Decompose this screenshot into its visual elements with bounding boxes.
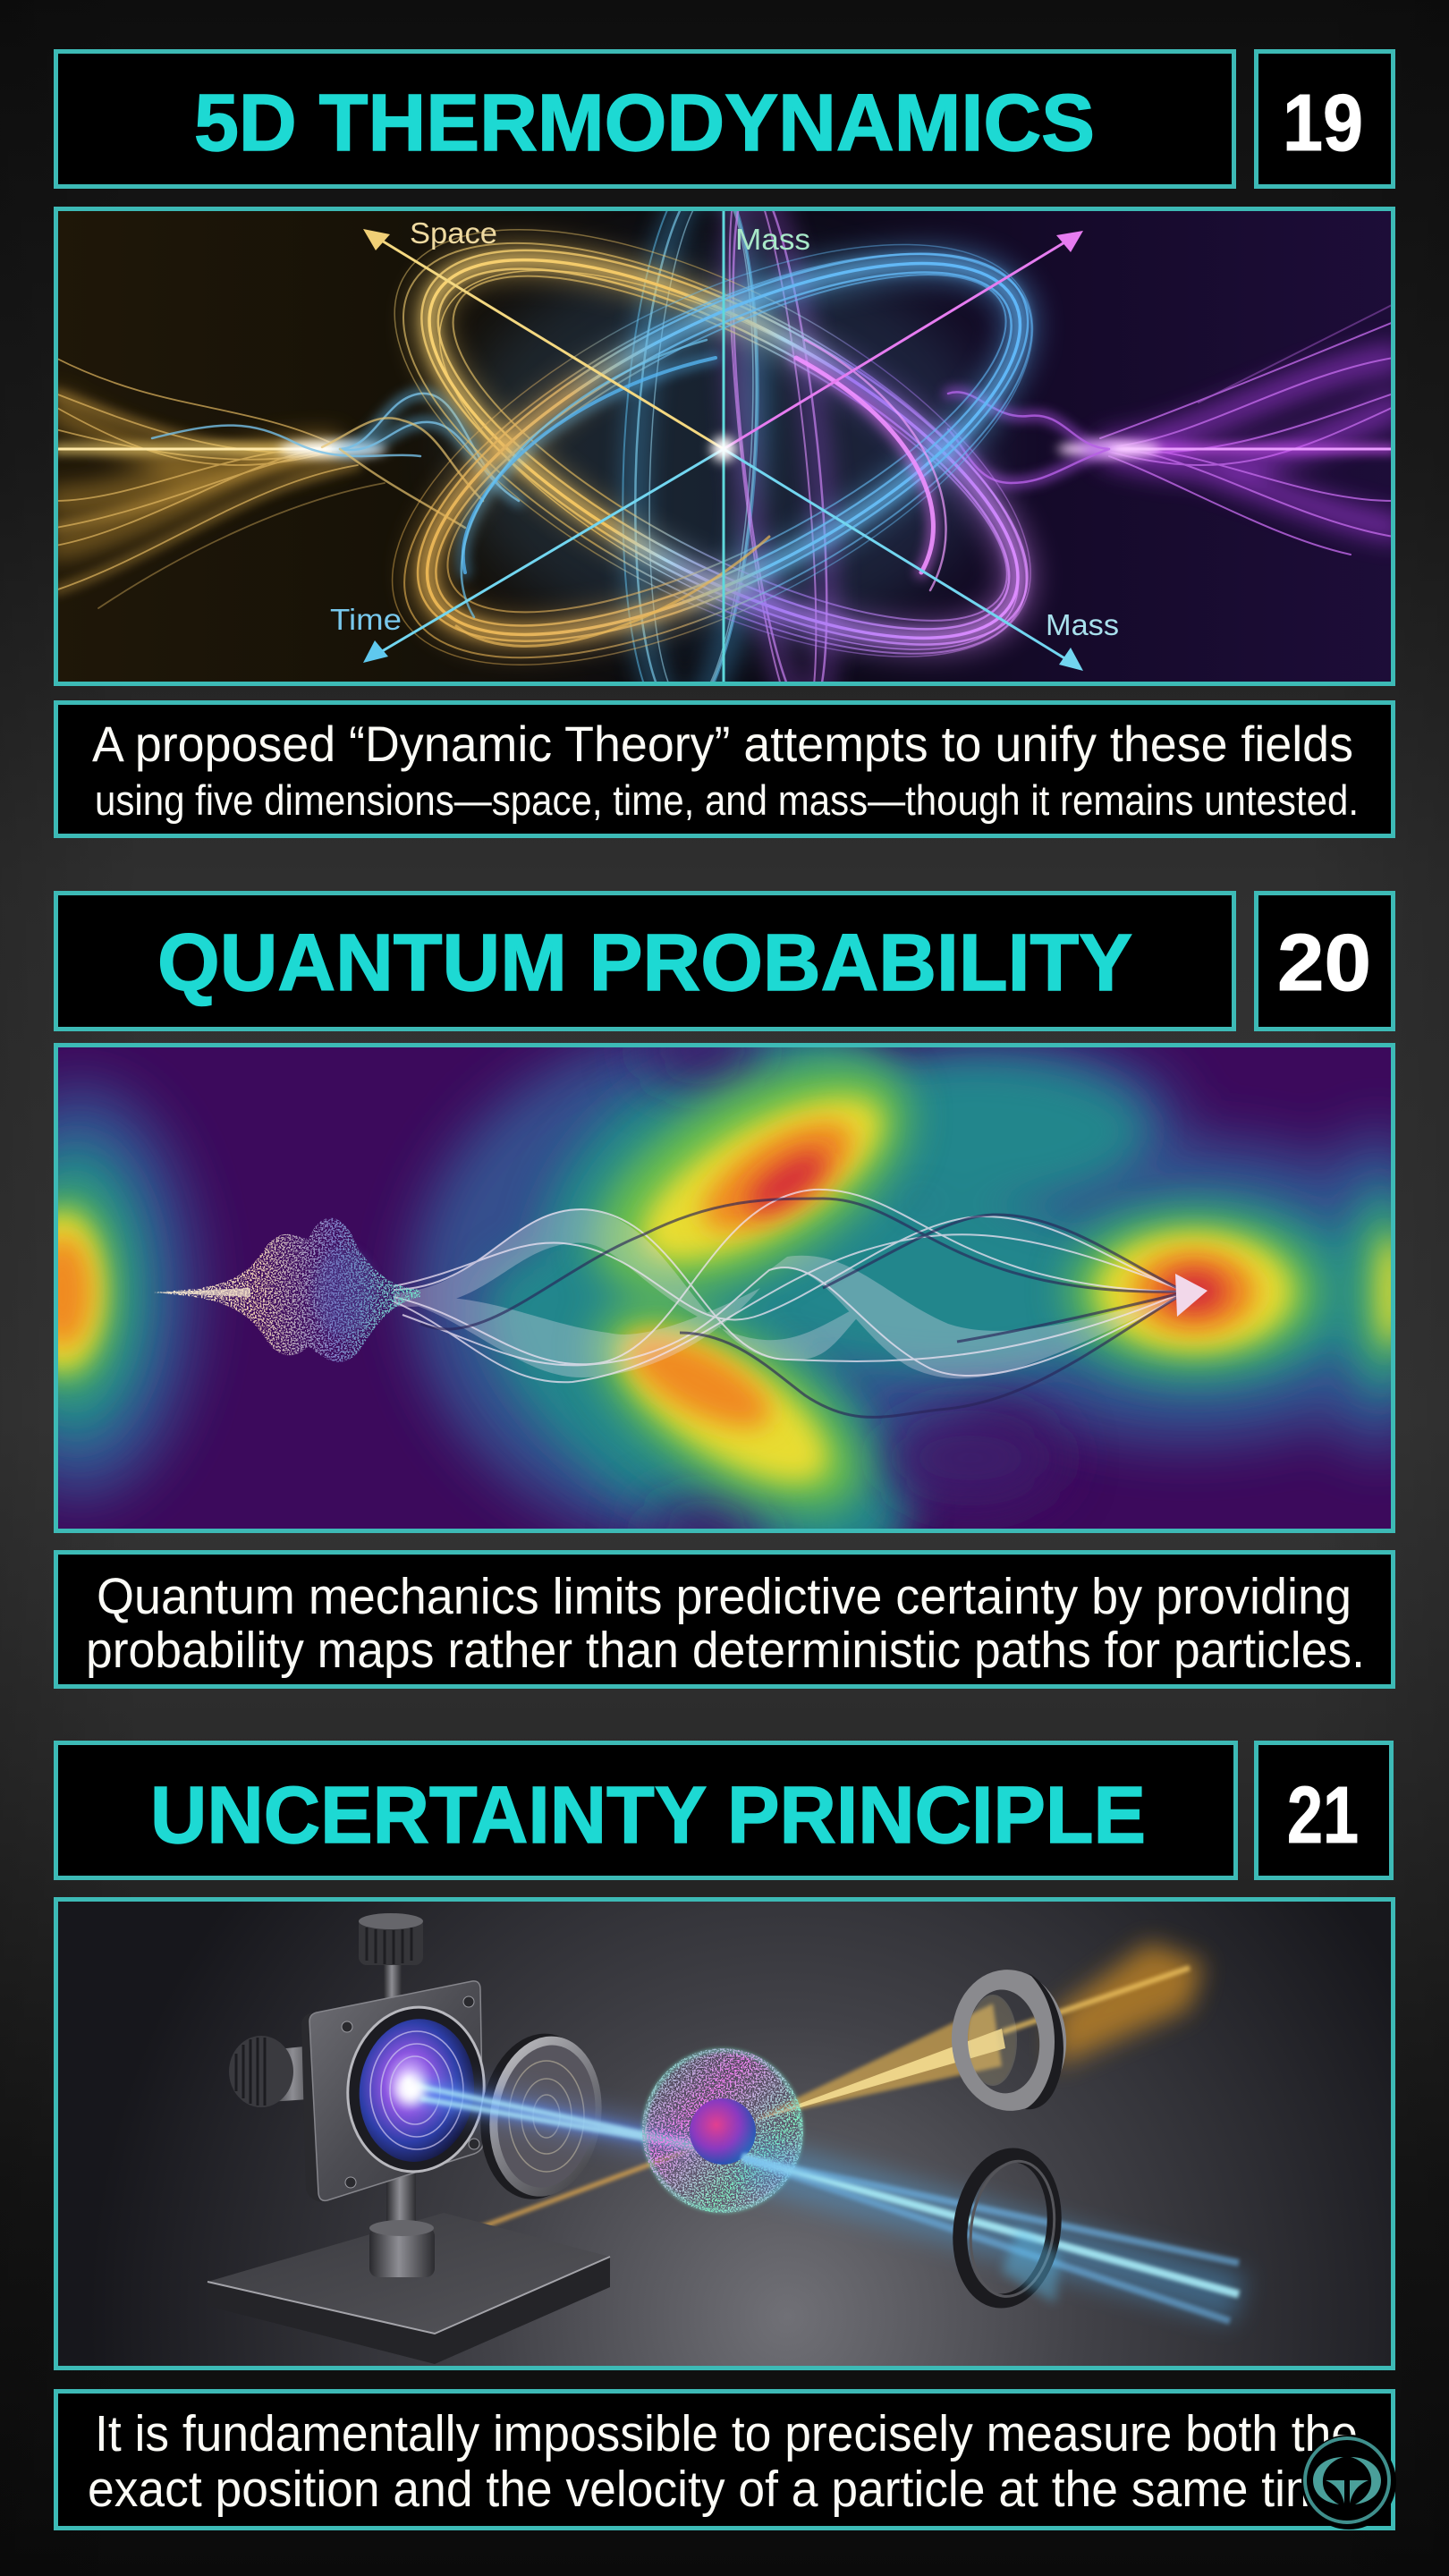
panel: uncertainty principle — [55, 1742, 1394, 2528]
panel: 5D thermodynamics — [55, 52, 1394, 835]
heading: 5D Thermodynamics — [55, 52, 1234, 186]
heading: 5D Thermodynamics: 5D THERMODYNAMICS — [194, 79, 1095, 168]
post and collar — [369, 2174, 435, 2277]
axis labels — [330, 216, 1119, 641]
tilted ring B: gold to blue — [392, 230, 1054, 668]
top right ring detector — [947, 1966, 1071, 2114]
heading: Quantum Probability — [55, 893, 1234, 1029]
left yellow wave bundle — [55, 358, 519, 608]
stand base — [208, 2213, 610, 2364]
heading: Uncertainty Principle — [55, 1742, 1236, 1878]
number badge 19 — [1256, 52, 1394, 186]
caption: dynamic theory: A proposed “Dynamic Theory” attempts to unify these fields — [92, 716, 1353, 772]
illustration: optical measurement apparatus — [55, 1899, 1394, 2368]
caption: quantum mechanics: probability maps rather than deterministic paths for particles. — [86, 1622, 1365, 1679]
second optical disk — [470, 2026, 612, 2207]
caption: quantum mechanics — [55, 1553, 1394, 1687]
scattered blue beams — [742, 2157, 1239, 2321]
caption: dynamic theory — [55, 703, 1394, 835]
axis labels: Space — [410, 216, 497, 250]
number badge 20 — [1256, 893, 1394, 1029]
wave-function ribbons — [394, 1190, 1192, 1417]
caption: measurement limit: exact position and the velocity of a particle at the same time. — [88, 2461, 1365, 2518]
vertical blue and purple rings — [610, 211, 850, 682]
blue incident beam — [397, 2075, 702, 2152]
heat map layers — [0, 969, 1449, 1634]
number badge 21: 21 — [1287, 1771, 1359, 1860]
yellow beam behind optics — [453, 1943, 1203, 2238]
axis labels: Time — [330, 603, 402, 636]
caption: measurement limit — [55, 2392, 1394, 2528]
mounting plate — [301, 1981, 483, 2202]
purple lens — [340, 2001, 492, 2178]
side knob — [229, 2036, 322, 2107]
number badge 19: 19 — [1283, 79, 1363, 168]
right purple wave bundle — [948, 304, 1394, 555]
axis labels: Mass — [735, 223, 810, 256]
arrowhead at probability peak — [1175, 1274, 1208, 1317]
axis lines — [369, 208, 1078, 684]
axis arrowheads — [363, 229, 1083, 671]
soft central glow — [455, 250, 992, 644]
particle cloud — [154, 1218, 420, 1362]
panel: quantum probability — [0, 893, 1449, 1687]
blue and magenta accent loops — [456, 340, 946, 646]
caption: measurement limit: It is fundamentally impossible to precisely measure both the — [95, 2405, 1358, 2462]
illustration: five-dimensional axes and energy rings — [54, 207, 1395, 686]
axis labels: Mass — [1046, 608, 1119, 641]
heading: Uncertainty Principle: UNCERTAINTY PRINCIPLE — [150, 1771, 1146, 1860]
heading: Quantum Probability: QUANTUM PROBABILITY — [157, 919, 1132, 1008]
tilted ring A: yellow to magenta — [394, 225, 1051, 672]
number badge 21 — [1256, 1742, 1392, 1878]
caption: quantum mechanics: Quantum mechanics limits predictive certainty by providing — [97, 1568, 1352, 1625]
illustration: probability heat map and particle paths — [0, 969, 1449, 1634]
lower right black ring detector — [951, 2149, 1063, 2307]
probability sphere — [642, 2048, 803, 2213]
number badge 20: 20 — [1277, 919, 1371, 1008]
top knob — [359, 1913, 423, 2004]
logo badge — [1301, 2435, 1396, 2529]
